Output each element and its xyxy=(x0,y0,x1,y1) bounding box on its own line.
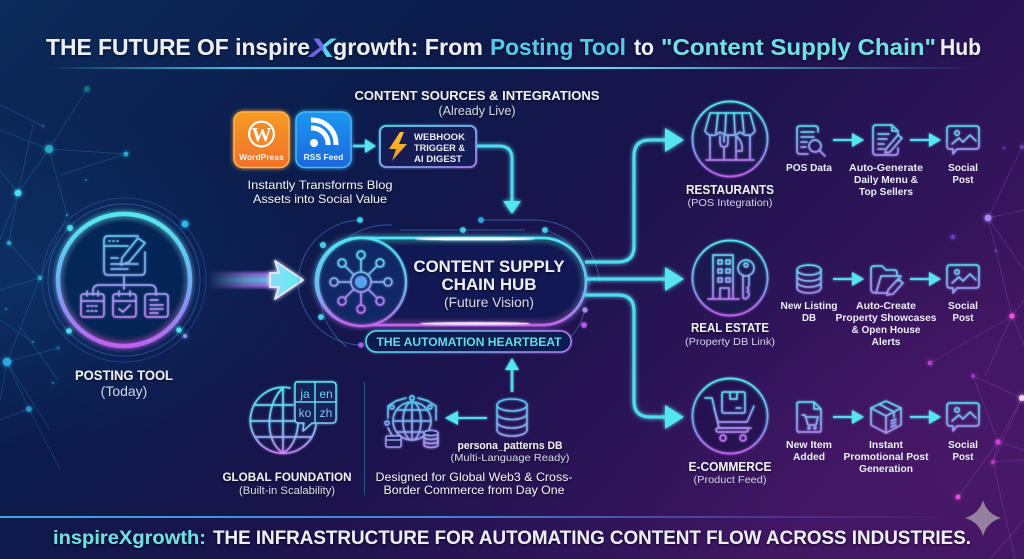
panel: real estate: (Property DB Link) xyxy=(685,336,775,348)
panel: content supply chain hub: (Future Vision) xyxy=(444,295,534,310)
panel: posting tool xyxy=(42,198,206,399)
heading: content sources: (Already Live) xyxy=(438,104,516,118)
icon: folder and pen xyxy=(871,266,903,295)
icon: shopping cart with box xyxy=(705,392,754,441)
icon: new item file xyxy=(797,402,821,432)
caption: global foundation xyxy=(222,470,352,497)
icon: package box xyxy=(871,401,901,433)
icon: globe with languages: en xyxy=(319,387,333,401)
icon: building and key xyxy=(708,255,754,299)
webhook box xyxy=(380,126,476,167)
flow: e-commerce steps: Added xyxy=(793,451,825,463)
title: growth: From xyxy=(333,34,483,60)
icon: globe with languages: zh xyxy=(320,406,332,420)
heartbeat badge xyxy=(366,331,571,352)
title: X xyxy=(306,33,338,63)
flow: e-commerce steps: New Item xyxy=(786,439,832,451)
footer tagline: THE INFRASTRUCTURE FOR AUTOMATING CONTENT FLOW ACROSS INDUSTRIES. xyxy=(213,527,971,549)
caption: persona patterns xyxy=(376,440,573,497)
title: Hub xyxy=(940,34,981,60)
flow: e-commerce steps: Instant xyxy=(869,439,903,451)
arrow: database to hub xyxy=(505,358,519,392)
icon: WordPress tile xyxy=(234,112,289,168)
icon: RSS tile xyxy=(296,112,351,168)
arrow: step 1 xyxy=(833,133,864,147)
flow: real estate steps xyxy=(780,265,979,348)
icon: sparkle xyxy=(965,500,1001,536)
flow: restaurants steps: Top Sellers xyxy=(859,186,913,198)
flow: restaurants steps: POS Data xyxy=(786,162,832,174)
arrows: hub to industries xyxy=(585,128,684,429)
flow: restaurants steps xyxy=(786,125,979,198)
flow: real estate steps: Post xyxy=(952,312,974,324)
caption: blog assets xyxy=(248,178,392,206)
node network: right xyxy=(928,145,1024,559)
icon: RSS tile: RSS Feed xyxy=(304,152,343,162)
webhook box: WEBHOOK xyxy=(414,132,465,142)
flow: e-commerce steps: Promotional Post xyxy=(844,451,929,463)
heartbeat badge: THE AUTOMATION HEARTBEAT xyxy=(376,335,562,349)
panel: real estate xyxy=(685,240,775,348)
flow: real estate steps: Auto-Create xyxy=(856,300,916,312)
panel: e-commerce: E-COMMERCE xyxy=(688,460,772,474)
panel: e-commerce: (Product Feed) xyxy=(694,474,766,486)
icon: globe with languages xyxy=(250,382,336,453)
flow: real estate steps: & Open House xyxy=(852,324,921,336)
panel: restaurants: (POS Integration) xyxy=(688,197,772,209)
flow: e-commerce steps: Post xyxy=(952,451,974,463)
arrow: sources to webhook xyxy=(353,139,376,153)
panel: content supply chain hub: CHAIN HUB xyxy=(442,275,536,294)
icon: listing database xyxy=(797,265,821,293)
footer tagline: inspireXgrowth: xyxy=(53,527,206,549)
caption: persona patterns: persona_patterns DB xyxy=(458,440,563,452)
arrow: webhook to hub xyxy=(477,146,521,214)
title: Posting Tool xyxy=(490,34,626,60)
icon: hub network xyxy=(330,251,392,313)
icon: web3 globe and data xyxy=(385,396,438,448)
flow: restaurants steps: Auto-Generate xyxy=(849,162,923,174)
caption: persona patterns: (Multi-Language Ready) xyxy=(450,452,570,464)
icon: globe with languages: ja xyxy=(299,387,310,401)
panel: content supply chain hub xyxy=(298,217,600,347)
title: "Content Supply Chain" xyxy=(661,34,936,60)
icon: auto-generate document xyxy=(873,125,902,155)
flow: real estate steps: Property Showcases xyxy=(836,312,937,324)
node network: left xyxy=(0,86,128,470)
icon: POS data xyxy=(797,126,825,156)
icon: social post xyxy=(947,126,979,154)
flow: real estate steps: DB xyxy=(802,312,816,324)
icon: WordPress tile: WordPress xyxy=(239,152,284,162)
heading: content sources xyxy=(354,88,600,118)
arrow: posting tool to hub xyxy=(208,261,303,299)
icon: social post xyxy=(947,403,979,431)
flow: e-commerce steps: Generation xyxy=(859,463,913,475)
flow: real estate steps: New Listing xyxy=(780,300,838,312)
arrow: step 1 xyxy=(833,272,864,286)
icon: social post xyxy=(947,265,979,293)
arrow: database to globe xyxy=(445,411,487,425)
icon: lightning bolt xyxy=(389,132,407,161)
arrow: step 2 xyxy=(910,133,941,147)
caption: blog assets: Assets into Social Value xyxy=(253,192,387,206)
title: to xyxy=(634,34,654,60)
orbit lines xyxy=(298,220,600,347)
icon: persona database xyxy=(497,399,527,436)
caption: persona patterns: Designed for Global Web3 & Cross- xyxy=(376,470,573,484)
panel: real estate: REAL ESTATE xyxy=(691,321,769,335)
flow: e-commerce steps: Social xyxy=(948,439,978,451)
title xyxy=(46,33,981,63)
panel: posting tool: (Today) xyxy=(101,383,147,399)
flow: real estate steps: Alerts xyxy=(872,336,901,348)
title: THE FUTURE OF inspire xyxy=(46,34,310,60)
panel: posting tool: POSTING TOOL xyxy=(75,367,173,383)
flow: real estate steps: Social xyxy=(948,300,978,312)
flow: restaurants steps: Daily Menu & xyxy=(854,174,918,186)
webhook box: TRIGGER & xyxy=(414,143,465,153)
arrow: step 2 xyxy=(910,410,941,424)
arrow: step 1 xyxy=(833,410,864,424)
caption: blog assets: Instantly Transforms Blog xyxy=(248,178,392,192)
flow: restaurants steps: Post xyxy=(952,174,974,186)
icon: globe with languages: ko xyxy=(299,406,312,420)
panel: restaurants xyxy=(686,102,774,209)
caption: global foundation: (Built-in Scalability) xyxy=(239,485,335,497)
flow: e-commerce steps xyxy=(786,401,979,475)
icon: posting dashboard xyxy=(81,236,168,317)
panel: content supply chain hub: CONTENT SUPPLY xyxy=(414,257,565,276)
icon: storefront xyxy=(705,113,755,160)
icon: WordPress tile: W xyxy=(252,124,272,146)
webhook box: AI DIGEST xyxy=(414,154,462,164)
arrow: step 2 xyxy=(910,272,941,286)
panel: e-commerce xyxy=(688,378,772,486)
caption: persona patterns: Border Commerce from Day One xyxy=(384,483,565,497)
flow: restaurants steps: Social xyxy=(948,162,978,174)
caption: global foundation: GLOBAL FOUNDATION xyxy=(222,470,352,484)
heading: content sources: CONTENT SOURCES & INTEGRATIONS xyxy=(354,88,600,103)
panel: restaurants: RESTAURANTS xyxy=(686,183,774,197)
